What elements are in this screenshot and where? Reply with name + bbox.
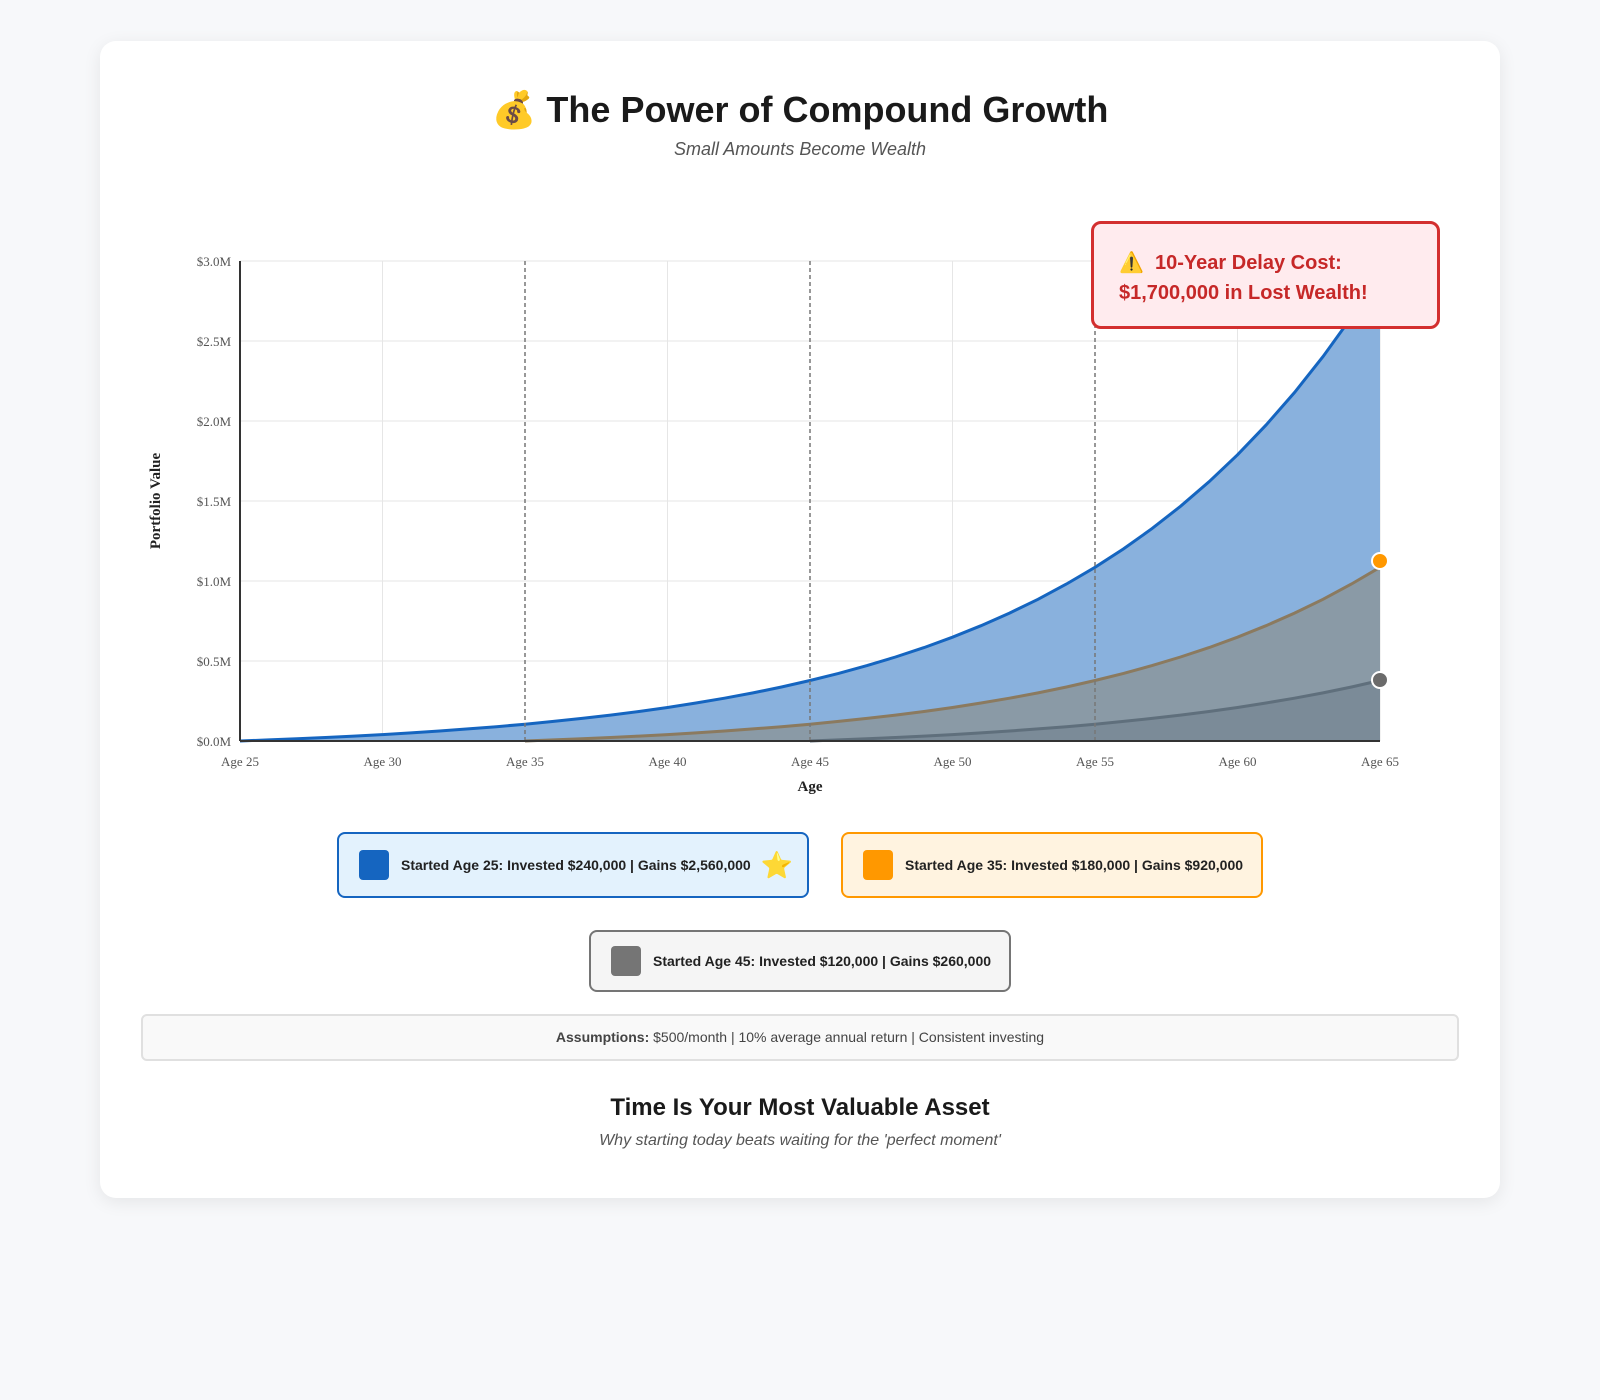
legend: age 45	[589, 930, 1011, 992]
y axis labels: $1.5M	[197, 494, 231, 509]
footer subtitle: Why starting today beats waiting for the 'perfect moment'	[599, 1132, 1001, 1149]
chart	[148, 254, 1399, 795]
x axis labels: Age 50	[934, 754, 971, 769]
y axis title: Portfolio Value	[148, 453, 164, 549]
legend: age 45: Started Age 45: Invested $120,000 | Gains $260,000	[653, 953, 991, 969]
x axis labels	[221, 754, 1399, 769]
axes	[240, 261, 1380, 741]
area: started age 35	[525, 567, 1380, 741]
legend: age 35: Started Age 35: Invested $180,000 | Gains $920,000	[905, 857, 1243, 873]
legend: age 25: Started Age 25: Invested $240,000 | Gains $2,560,000	[401, 857, 751, 873]
y axis labels: $0.5M	[197, 654, 231, 669]
legend: age 25: ⭐	[761, 850, 793, 880]
footer heading: Time Is Your Most Valuable Asset	[610, 1094, 990, 1121]
y axis labels	[197, 254, 231, 749]
callout: delay cost	[1091, 221, 1440, 329]
y axis labels: $2.0M	[197, 414, 231, 429]
x axis labels: Age 40	[649, 754, 686, 769]
legend: age 35	[841, 832, 1263, 898]
y axis labels: $3.0M	[197, 254, 231, 269]
title: 💰 The Power of Compound Growth	[492, 89, 1108, 130]
x axis labels: Age 35	[506, 754, 544, 769]
legend: age 25	[337, 832, 809, 898]
y axis labels: $1.0M	[197, 574, 231, 589]
card	[100, 41, 1500, 1198]
area: started age 45	[810, 680, 1380, 741]
x axis labels: Age 25	[221, 754, 259, 769]
area: started age 25	[240, 274, 1380, 741]
end dots	[1372, 553, 1388, 688]
x axis labels: Age 60	[1219, 754, 1256, 769]
y axis labels: $0.0M	[197, 734, 231, 749]
assumptions box	[141, 1014, 1459, 1061]
assumptions box: Assumptions: $500/month | 10% average annual return | Consistent investing	[556, 1029, 1044, 1045]
x axis labels: Age 30	[364, 754, 401, 769]
y axis labels: $2.5M	[197, 334, 231, 349]
x axis labels: Age 65	[1361, 754, 1399, 769]
callout: delay cost: ⚠️ 10-Year Delay Cost:	[1119, 252, 1342, 274]
x axis title: Age	[798, 779, 823, 795]
x axis labels: Age 55	[1076, 754, 1114, 769]
x axis labels: Age 45	[791, 754, 829, 769]
callout: delay cost: $1,700,000 in Lost Wealth!	[1119, 282, 1368, 304]
subtitle: Small Amounts Become Wealth	[674, 139, 926, 159]
